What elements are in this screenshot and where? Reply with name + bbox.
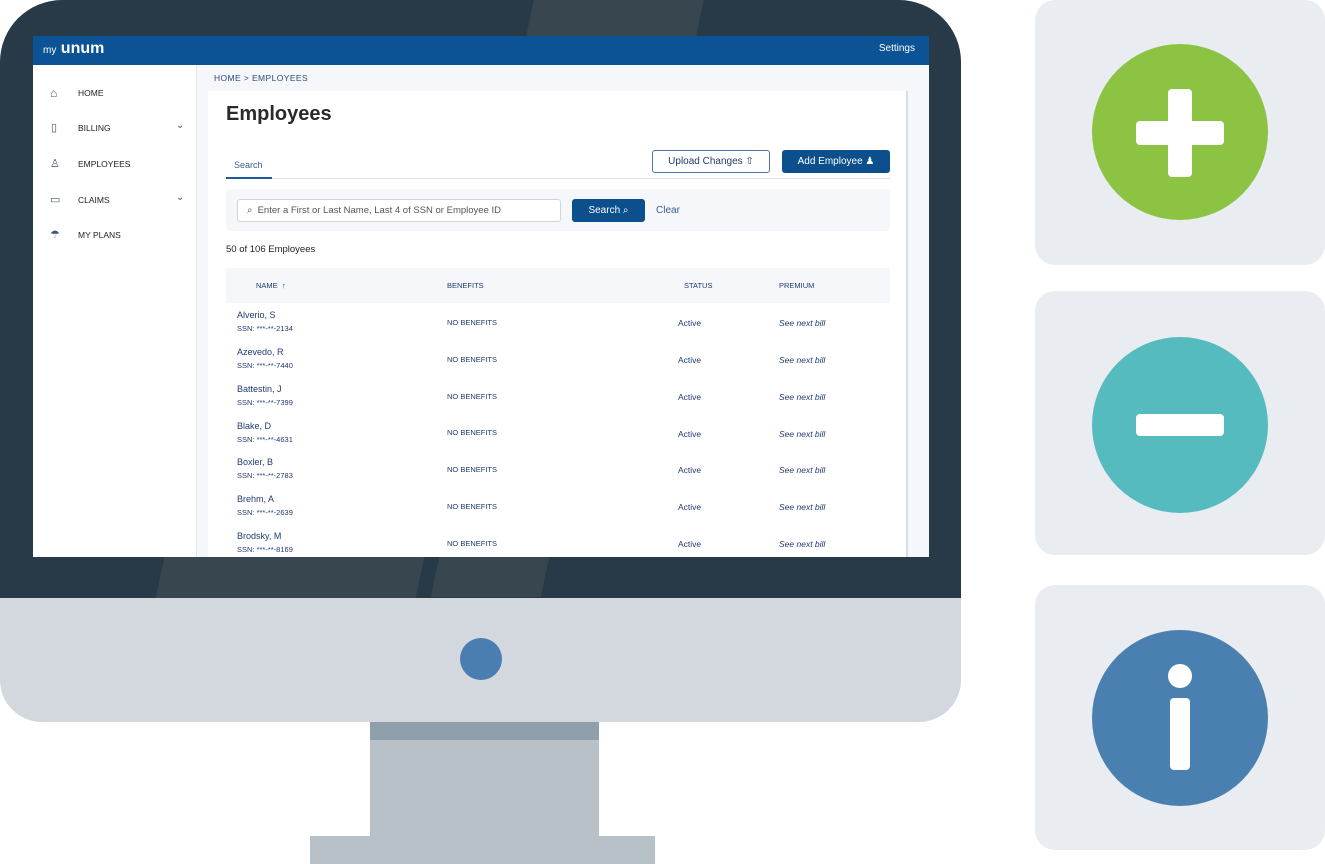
stand [370, 722, 599, 836]
table: NAME ↑ [256, 281, 286, 290]
home button [460, 638, 502, 680]
search panel [226, 189, 890, 231]
table: NO BENEFITS [447, 502, 497, 511]
sidebar: HOME [78, 88, 104, 98]
page title: Employees [226, 103, 332, 125]
monitor chin [0, 598, 961, 722]
table: Active [678, 539, 701, 549]
table: See next bill [779, 539, 825, 549]
sidebar: ▭ [50, 194, 60, 206]
table: NO BENEFITS [447, 318, 497, 327]
table: Boxler, B [237, 457, 273, 467]
table: SSN: ***-**-7399 [237, 398, 293, 407]
table: Active [678, 502, 701, 512]
count: 50 of 106 Employees [226, 244, 315, 255]
table: Blake, D [237, 421, 271, 431]
sidebar: CLAIMS [78, 195, 110, 205]
icon: info [1092, 630, 1268, 806]
table: SSN: ***-**-2639 [237, 508, 293, 517]
sidebar: ⌄ [176, 120, 184, 131]
icon: minus [1092, 337, 1268, 513]
table: Active [678, 392, 701, 402]
tabs [226, 178, 890, 179]
table: NO BENEFITS [447, 428, 497, 437]
table: STATUS [684, 281, 712, 290]
sidebar [33, 65, 197, 557]
table: SSN: ***-**-4631 [237, 435, 293, 444]
table: PREMIUM [779, 281, 814, 290]
main card [208, 91, 908, 561]
add employee button: Add Employee ♟ [798, 156, 874, 167]
panel: remove [1035, 291, 1325, 555]
table: See next bill [779, 355, 825, 365]
table: Active [678, 465, 701, 475]
sidebar: MY PLANS [78, 230, 121, 240]
table: Active [678, 355, 701, 365]
breadcrumb: HOME > EMPLOYEES [214, 73, 308, 83]
upload button: Upload Changes ⇧ [668, 156, 754, 167]
main card: Search [234, 160, 263, 170]
table: SSN: ***-**-8169 [237, 545, 293, 554]
panel: info [1035, 585, 1325, 850]
sidebar: EMPLOYEES [78, 159, 130, 169]
table: Active [678, 429, 701, 439]
table: BENEFITS [447, 281, 484, 290]
table: NO BENEFITS [447, 392, 497, 401]
table: Brehm, A [237, 494, 274, 504]
upload button [652, 150, 770, 173]
header bar: Settings [879, 43, 915, 54]
search panel: Clear [656, 205, 680, 216]
sidebar: ⌂ [50, 86, 57, 100]
table: Battestin, J [237, 384, 282, 394]
table: SSN: ***-**-2783 [237, 471, 293, 480]
sidebar: ⌄ [176, 192, 184, 203]
icon: plus [1092, 44, 1268, 220]
table: SSN: ***-**-2134 [237, 324, 293, 333]
header bar [33, 36, 929, 65]
table: Brodsky, M [237, 531, 281, 541]
table: See next bill [779, 318, 825, 328]
table: See next bill [779, 502, 825, 512]
table: NO BENEFITS [447, 539, 497, 548]
table: See next bill [779, 465, 825, 475]
sidebar: BILLING [78, 123, 111, 133]
table: Active [678, 318, 701, 328]
table: NO BENEFITS [447, 465, 497, 474]
table: NO BENEFITS [447, 355, 497, 364]
search panel: Search ⌕ [588, 205, 629, 216]
search panel: ⌕ Enter a First or Last Name, Last 4 of SSN or Employee ID [247, 205, 501, 216]
table: Azevedo, R [237, 347, 284, 357]
sidebar: ☂ [50, 229, 60, 241]
sidebar: ♙ [50, 158, 60, 170]
table: Alverio, S [237, 310, 276, 320]
sidebar: ▯ [51, 122, 57, 134]
table: See next bill [779, 392, 825, 402]
table: SSN: ***-**-7440 [237, 361, 293, 370]
table: See next bill [779, 429, 825, 439]
screen [33, 36, 929, 557]
monitor [0, 0, 961, 864]
panel: add [1035, 0, 1325, 265]
add employee button [782, 150, 890, 173]
monitor bezel [0, 0, 961, 598]
table [226, 268, 890, 554]
header bar: my unum [43, 40, 104, 57]
